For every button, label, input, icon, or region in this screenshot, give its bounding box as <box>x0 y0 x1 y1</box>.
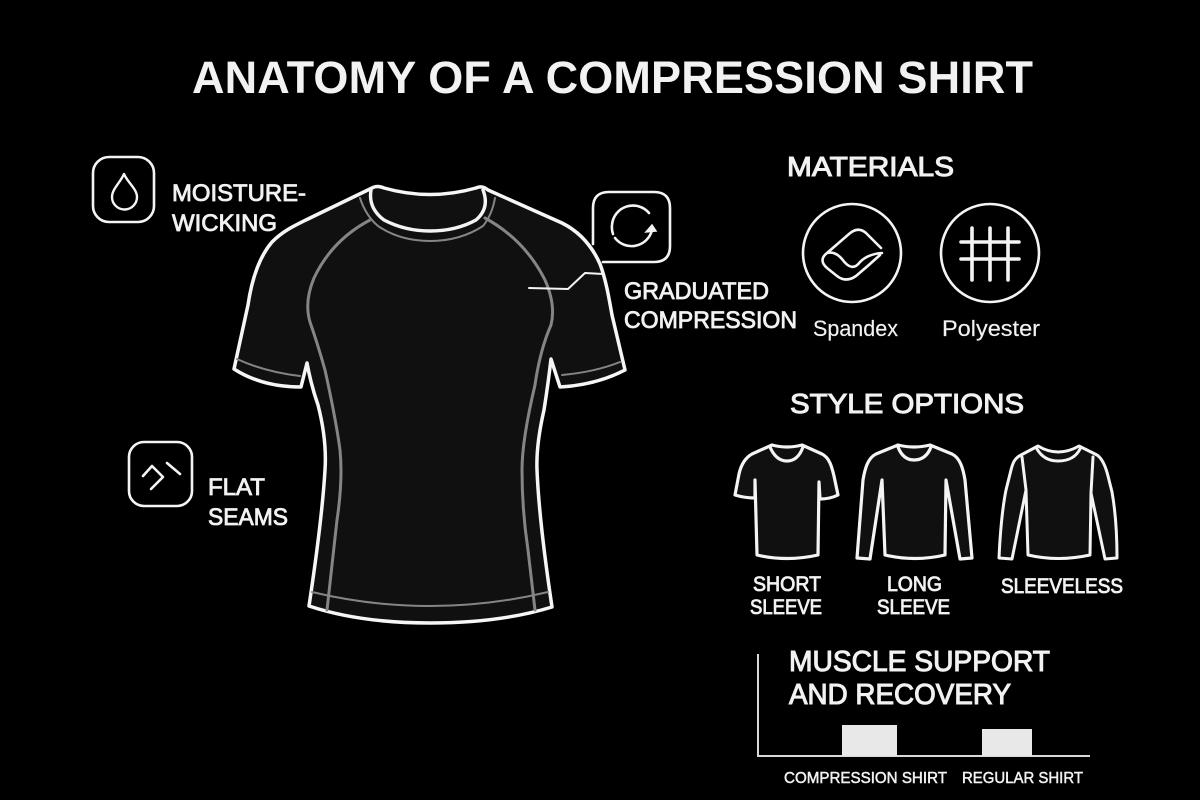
bar: regular shirt <box>982 729 1032 756</box>
label: SEAMS <box>208 504 288 531</box>
label <box>624 278 797 334</box>
panel: materials <box>787 151 1040 341</box>
callout: moisture-wicking <box>93 157 306 237</box>
label: polyester: Polyester <box>942 316 1040 341</box>
sleeve cuff seams <box>237 359 300 376</box>
label: spandex: Spandex <box>813 316 898 341</box>
icon: short sleeve shirt <box>735 445 838 558</box>
callout line <box>529 273 603 289</box>
bar chart <box>758 654 1090 787</box>
label: short sleeve: SHORT <box>753 573 821 596</box>
label: MOISTURE- <box>172 180 306 207</box>
title: ANATOMY OF A COMPRESSION SHIRT <box>192 52 1033 103</box>
label <box>208 474 288 531</box>
axis label: compression shirt: COMPRESSION SHIRT <box>784 770 947 787</box>
collar <box>371 190 485 231</box>
axis label: regular shirt: REGULAR SHIRT <box>962 770 1083 787</box>
icon: circular arrows <box>593 192 670 262</box>
callout: graduated compression <box>593 192 797 334</box>
label: GRADUATED <box>624 278 769 305</box>
label: WICKING <box>172 210 277 237</box>
icon: polyester grid <box>941 204 1039 302</box>
heading: AND RECOVERY <box>789 679 1011 711</box>
heading: MUSCLE SUPPORT <box>789 646 1050 678</box>
raglan and side seams <box>308 220 370 610</box>
label: FLAT <box>208 474 265 501</box>
bar: compression shirt <box>842 725 897 756</box>
label: long sleeve <box>877 573 950 619</box>
label: COMPRESSION <box>624 307 797 334</box>
label: sleeveless: SLEEVELESS <box>1001 575 1123 598</box>
callout: flat seams <box>129 442 288 531</box>
heading: STYLE OPTIONS <box>790 388 1024 419</box>
label: long sleeve: LONG <box>887 573 942 596</box>
icon: long sleeve shirt <box>857 445 972 559</box>
collar seam <box>360 198 495 241</box>
heading <box>789 646 1050 711</box>
label: long sleeve: SLEEVE <box>877 596 950 619</box>
icon: water drop <box>93 157 154 222</box>
icon: spandex fabric <box>803 204 901 302</box>
icon: sleeveless shirt <box>999 446 1117 559</box>
heading: MATERIALS <box>787 151 954 182</box>
panel: style options <box>735 388 1123 619</box>
label: short sleeve: SLEEVE <box>750 596 822 619</box>
main shirt diagram <box>234 186 625 623</box>
hem seam <box>312 592 548 606</box>
icon: seams <box>129 442 192 506</box>
label: short sleeve <box>750 573 822 619</box>
label <box>172 180 306 237</box>
shirt outline <box>234 186 625 623</box>
panel: muscle support and recovery <box>758 646 1090 787</box>
